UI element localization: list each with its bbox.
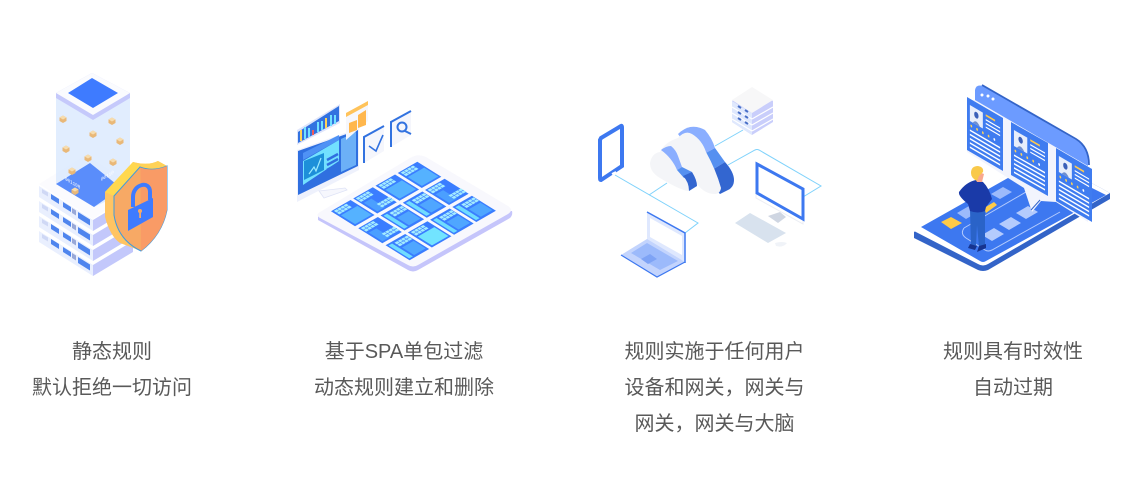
icon: SPA packet grid (297, 101, 512, 272)
profile card 3 (1056, 148, 1092, 222)
speech window (967, 85, 1089, 222)
phone (600, 126, 622, 180)
caption: static rules: 静态规则 (72, 341, 152, 363)
caption: rule implementation (624, 341, 804, 435)
tiles (331, 162, 496, 260)
caption: time-limited rules: 自动过期 (973, 377, 1053, 399)
binary labels on base (65, 169, 114, 191)
line chart card (364, 126, 384, 163)
phone base (914, 155, 1110, 271)
desktop monitor (735, 164, 803, 247)
server stack (732, 87, 773, 135)
top slab (56, 73, 130, 120)
platform (318, 155, 512, 272)
caption: rule implementation: 网关，网关与大脑 (634, 413, 794, 435)
laptop (621, 212, 685, 277)
caption: time-limited rules (943, 341, 1083, 399)
floating cubes (60, 116, 124, 195)
caption: SPA filtering: 动态规则建立和删除 (314, 377, 494, 399)
server stack (39, 155, 138, 277)
base plate (56, 163, 121, 207)
icon: cloud network (600, 87, 821, 277)
caption: static rules: 默认拒绝一切访问 (32, 377, 192, 399)
caption: SPA filtering (314, 341, 494, 399)
glass column (56, 93, 130, 207)
binary labels on base: 00110 (101, 169, 114, 183)
binary labels on base: 001100 (65, 176, 80, 191)
caption: rule implementation: 设备和网关，网关与 (624, 377, 804, 399)
person (959, 166, 992, 252)
search card (391, 111, 411, 147)
connection lines (615, 130, 821, 233)
bar chart card (297, 104, 340, 145)
caption: SPA filtering: 基于SPA单包过滤 (325, 341, 483, 363)
profile card 2 (1011, 122, 1048, 196)
icon: phone with profile cards and person (914, 85, 1110, 271)
icon: server with shield (39, 73, 167, 277)
caption: rule implementation: 规则实施于任何用户 (624, 341, 804, 363)
orange card (346, 101, 368, 140)
caption: time-limited rules: 规则具有时效性 (943, 341, 1083, 363)
cloud (650, 127, 734, 194)
shield (105, 161, 167, 251)
profile card 1 (967, 97, 1003, 171)
caption: static rules (32, 341, 192, 399)
monitor (297, 128, 359, 202)
